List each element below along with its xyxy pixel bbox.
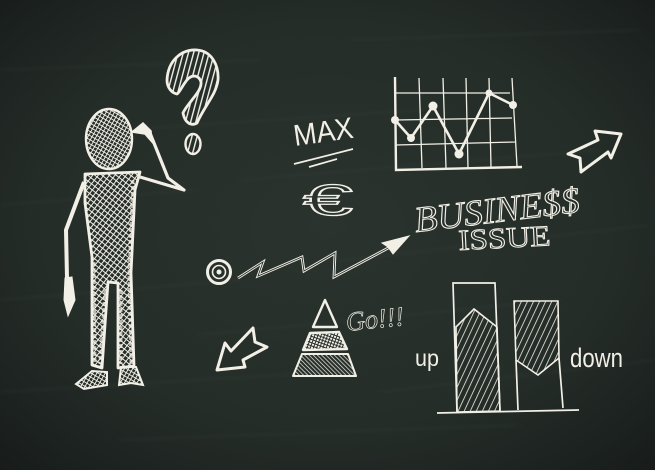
figure left hand: [64, 277, 75, 316]
target circle: [208, 260, 230, 284]
right bar fill: [514, 301, 559, 375]
bar chart baseline: [437, 410, 579, 413]
up label: up: [415, 345, 439, 371]
chart grid: [395, 78, 517, 168]
question mark hook: [167, 50, 218, 124]
figure right arm: [140, 133, 184, 190]
zigzag arrow: [238, 236, 409, 278]
Go label: Go!!!: [344, 301, 405, 337]
left bar fill: [456, 309, 500, 412]
euro symbol: €: [303, 176, 353, 225]
pyramid bottom tier: [293, 354, 356, 376]
arrow down left: [217, 328, 267, 370]
question mark dot: [186, 134, 200, 154]
ISSUE heading: ISSUE: [458, 220, 551, 257]
MAX word: MAX: [291, 112, 355, 153]
line chart: [391, 77, 522, 170]
pyramid top tier: [313, 300, 337, 327]
zigzag arrowhead: [382, 236, 409, 254]
question mark: [167, 50, 218, 154]
zigzag outer line: [238, 246, 392, 278]
figure left arm: [66, 182, 84, 278]
pyramid middle tier: [303, 332, 347, 350]
figure body: [85, 172, 140, 368]
left bar outline: [453, 283, 500, 412]
figure head: [86, 109, 132, 169]
zigzag inner line: [238, 246, 392, 278]
MAX label: [291, 112, 355, 167]
figure left foot: [76, 371, 107, 389]
thinking figure: [64, 109, 184, 389]
figure right hand: [132, 123, 152, 142]
chart axes: [395, 77, 522, 170]
down label: down: [570, 343, 623, 373]
figure right foot: [119, 367, 143, 385]
chart data points: [391, 90, 517, 158]
figure dense side shading: [94, 180, 133, 364]
bar chart: [437, 283, 579, 413]
chart data line: [395, 93, 513, 154]
pyramid: [293, 300, 356, 376]
arrow up right: [568, 131, 621, 172]
right bar outline: [516, 358, 563, 410]
MAX underlines: [294, 149, 353, 167]
BUSINESS heading: BUSINE$$: [412, 180, 582, 240]
